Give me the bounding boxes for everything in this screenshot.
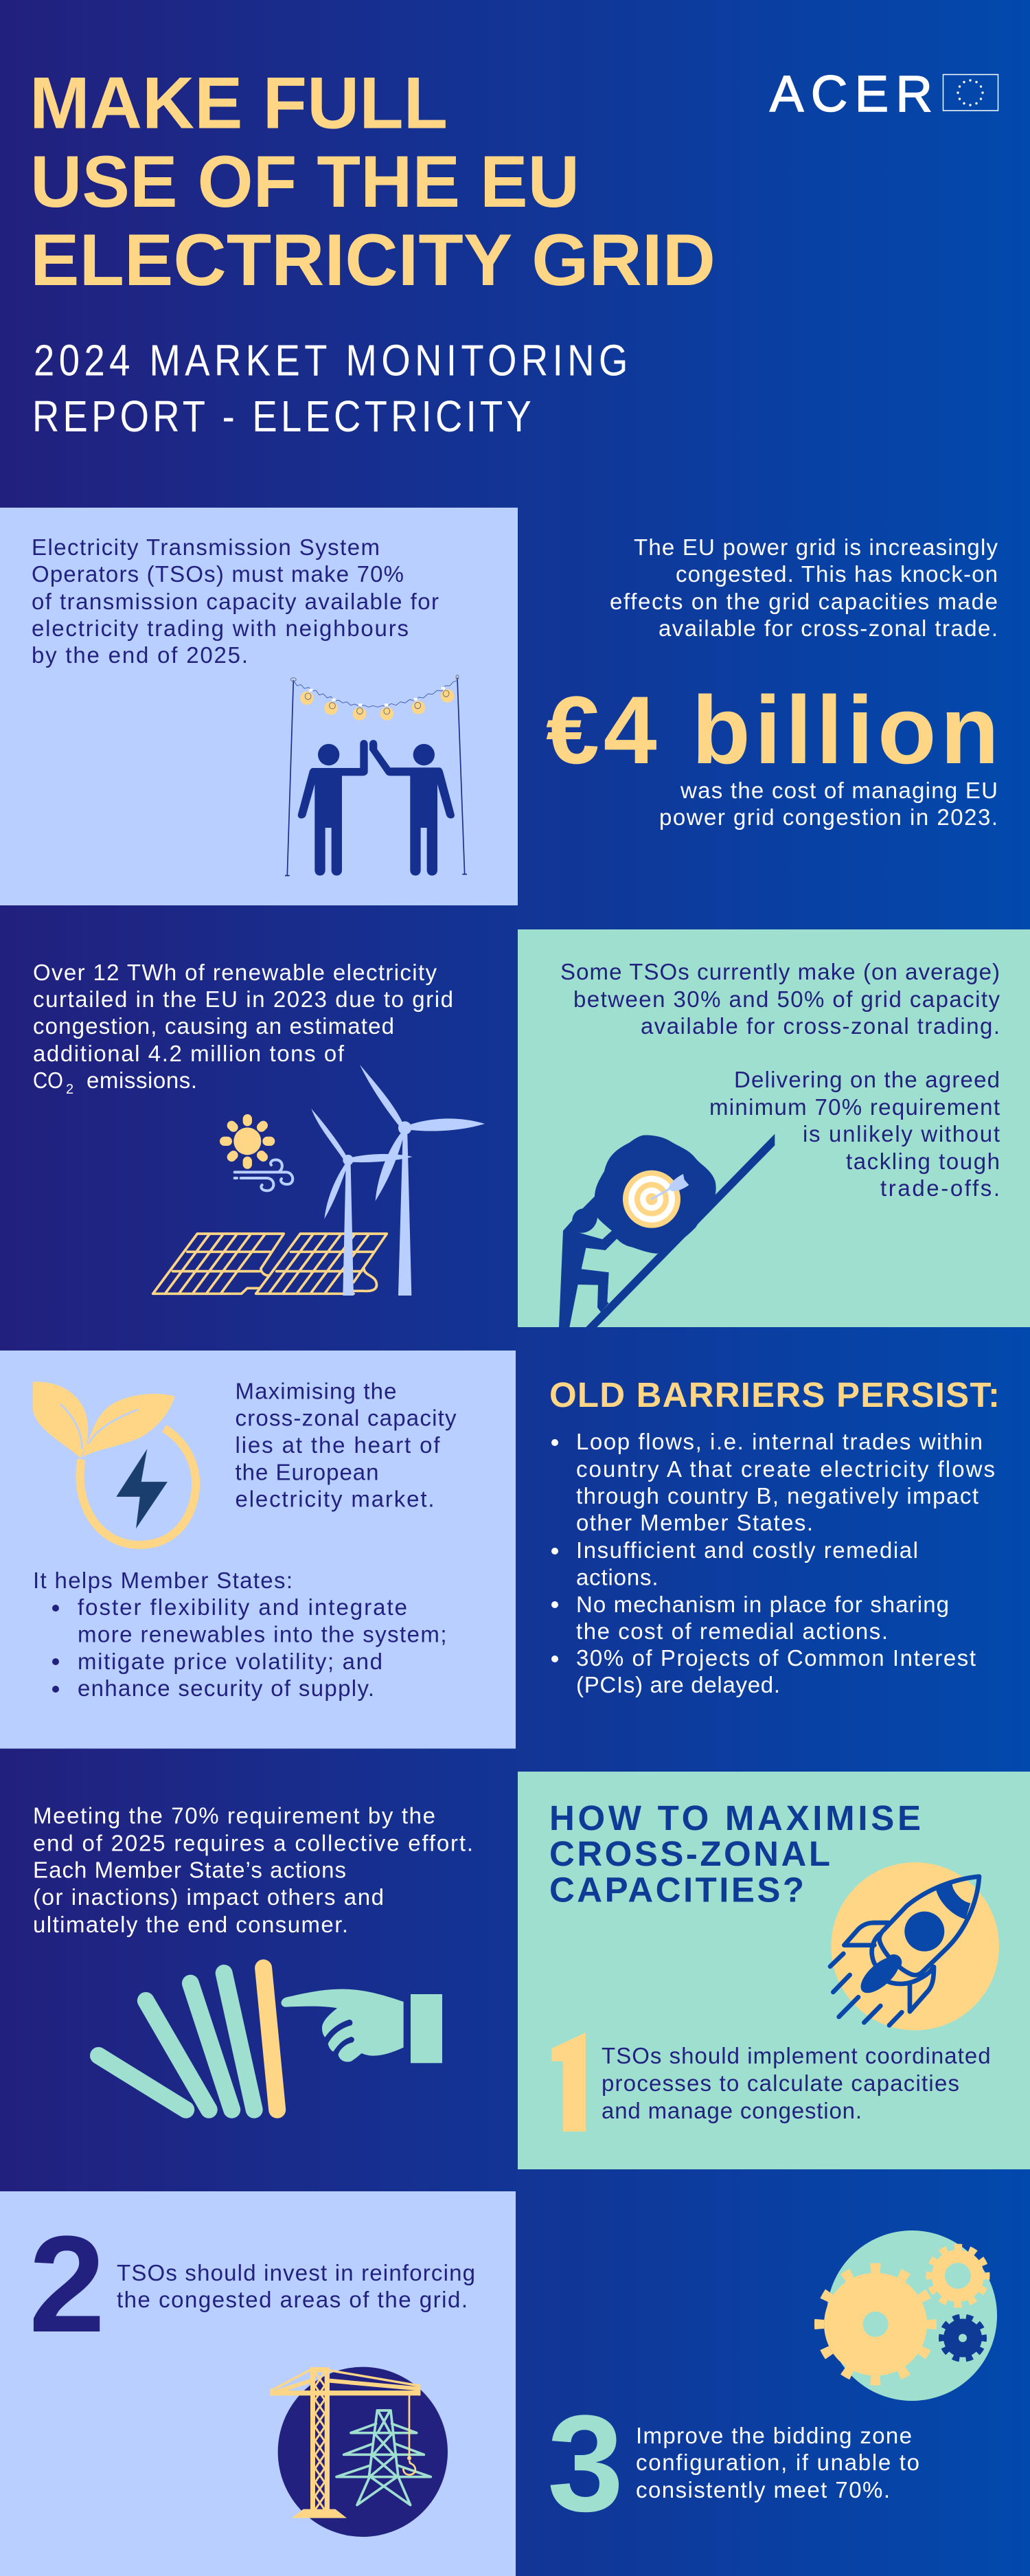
panel: congestion cost bbox=[546, 534, 999, 830]
list: barriers: Loop flows, i.e. internal trades within bbox=[576, 1429, 983, 1454]
text: meeting the requirement bbox=[33, 1803, 473, 1937]
panel: step 2 bbox=[0, 2191, 516, 2576]
subtitle bbox=[32, 335, 628, 441]
icon: crane and pylon bbox=[270, 2367, 448, 2537]
text: 30 to 50 percent: between 30% and 50% of grid capacity bbox=[573, 986, 1000, 1012]
subtitle: REPORT - ELECTRICITY bbox=[32, 392, 531, 441]
panel: old barriers bbox=[549, 1375, 1000, 1697]
text: meeting the requirement: end of 2025 requires a collective effort. bbox=[33, 1830, 473, 1856]
text: 12 TWh curtailed: CO bbox=[33, 1067, 63, 1093]
icon: high five under string lights bbox=[285, 675, 467, 876]
icon: pushing hand bbox=[282, 1989, 442, 2063]
text: meeting the requirement: ultimately the end consumer. bbox=[33, 1912, 348, 1937]
text: TSOs must make 70% bbox=[32, 534, 439, 668]
text: step 2: TSOs should invest in reinforcing bbox=[117, 2260, 475, 2285]
text: delivering on requirement: tackling tough bbox=[846, 1149, 1000, 1174]
text: 12 TWh curtailed: congestion, causing an estimated bbox=[33, 1013, 394, 1039]
panel: curtailed renewables bbox=[33, 960, 485, 1296]
list: barriers: actions. bbox=[576, 1565, 658, 1590]
text: step 1: and manage congestion. bbox=[602, 2098, 862, 2123]
icon: solar panels, sun, wind and turbines bbox=[153, 1065, 485, 1296]
list: barriers: Insufficient and costly remedial bbox=[576, 1537, 918, 1563]
text: 30 to 50 percent: available for cross-zonal trading. bbox=[641, 1013, 1000, 1039]
text: step 3: Improve the bidding zone bbox=[636, 2423, 912, 2448]
text: delivering on requirement: trade-offs. bbox=[880, 1175, 1000, 1201]
text: maximising the capacity: lies at the heart of bbox=[235, 1432, 440, 1458]
text: 12 TWh curtailed: 2 bbox=[66, 1082, 73, 1097]
icon: target with dart bbox=[623, 1171, 689, 1228]
text: maximising the capacity: cross-zonal capacity bbox=[235, 1405, 457, 1431]
icon: pylon bbox=[336, 2410, 431, 2505]
text: step 1: processes to calculate capacities bbox=[602, 2070, 959, 2096]
header bbox=[30, 62, 998, 441]
icon: falling dominoes bbox=[98, 1968, 277, 2110]
text: delivering on requirement: minimum 70% requirement bbox=[709, 1094, 1000, 1120]
text: TSOs must make 70%: Operators (TSOs) must make 70% bbox=[32, 561, 404, 587]
text: 12 TWh curtailed: emissions. bbox=[87, 1067, 197, 1093]
text: meeting the requirement: (or inactions) impact others and bbox=[33, 1884, 384, 1910]
panel: step 3 bbox=[547, 2230, 997, 2540]
list: barriers bbox=[551, 1429, 995, 1697]
text: maximising the capacity: the European bbox=[235, 1459, 379, 1484]
text: step 3 bbox=[636, 2423, 919, 2502]
icon: gears bbox=[819, 2230, 997, 2401]
text: meeting the requirement: Meeting the 70% requirement by the bbox=[33, 1803, 435, 1829]
text: meeting the requirement: Each Member State’s actions bbox=[33, 1857, 346, 1883]
text: TSOs must make 70%: of transmission capacity available for bbox=[32, 589, 439, 614]
icon: wind turbines bbox=[311, 1065, 485, 1296]
text: grid congestion: available for cross-zonal trade. bbox=[659, 615, 998, 641]
heading: old barriers persist: OLD BARRIERS PERSIST: bbox=[549, 1375, 1000, 1414]
icon: figure pushing boulder uphill bbox=[559, 1134, 775, 1327]
text: cost caption bbox=[659, 778, 998, 830]
list: barriers: 30% of Projects of Common Interest bbox=[576, 1645, 976, 1671]
icon: wind bbox=[235, 1160, 293, 1190]
text: grid congestion: congested. This has knock-on bbox=[676, 561, 998, 587]
title: MAKE FULL bbox=[30, 62, 448, 144]
text: TSOs must make 70%: by the end of 2025. bbox=[32, 642, 248, 668]
text: 12 TWh curtailed: additional 4.2 million tons of bbox=[33, 1041, 345, 1066]
text: delivering on requirement: is unlikely without bbox=[803, 1121, 1000, 1146]
text: benefits for Member States: It helps Member States: bbox=[33, 1568, 293, 1593]
heading: how to maximise cross-zonal capacities: CAPACITIES? bbox=[549, 1870, 804, 1910]
icon: sun bbox=[225, 1119, 271, 1164]
text: cost caption: was the cost of managing EU bbox=[680, 778, 998, 803]
list: barriers: the cost of remedial actions. bbox=[576, 1618, 888, 1644]
heading: how to maximise cross-zonal capacities: HOW TO MAXIMISE bbox=[549, 1798, 921, 1838]
big number: 4 billion euro: €4 billion bbox=[546, 676, 999, 784]
step number 2: 2 bbox=[29, 2208, 105, 2361]
text: step 2: the congested areas of the grid. bbox=[117, 2287, 468, 2312]
list: barriers: through country B, negatively impact bbox=[576, 1483, 978, 1509]
text: 12 TWh curtailed: Over 12 TWh of renewable electricity bbox=[33, 960, 437, 985]
text: step 3: configuration, if unable to bbox=[636, 2450, 919, 2475]
text: benefits for Member States: mitigate price volatility; and bbox=[78, 1649, 382, 1674]
text: delivering on requirement: Delivering on the agreed bbox=[734, 1067, 1000, 1092]
text: delivering on requirement bbox=[709, 1067, 1000, 1201]
title: ELECTRICITY GRID bbox=[30, 218, 716, 301]
title bbox=[30, 62, 716, 301]
icon: leaves with lightning bolt bbox=[33, 1382, 196, 1545]
text: maximising the capacity bbox=[235, 1378, 457, 1511]
text: grid congestion: The EU power grid is increasingly bbox=[634, 534, 998, 560]
subtitle: 2024 MARKET MONITORING bbox=[34, 335, 628, 385]
title: USE OF THE EU bbox=[30, 140, 580, 223]
text: TSOs must make 70%: Electricity Transmission System bbox=[32, 534, 380, 560]
icon: crane bbox=[270, 2367, 420, 2518]
text: TSOs must make 70%: electricity trading with neighbours bbox=[32, 615, 409, 641]
text: step 1 bbox=[602, 2043, 991, 2123]
logo: ACER with EU flag: ACER bbox=[770, 65, 932, 122]
text: step 1: TSOs should implement coordinated bbox=[602, 2043, 991, 2068]
panel: current availability bbox=[518, 929, 1030, 1327]
step number 3: 3 bbox=[547, 2387, 623, 2540]
list: barriers: No mechanism in place for sharing bbox=[576, 1592, 949, 1617]
panel: collective effort bbox=[33, 1803, 473, 2110]
heading: how to maximise cross-zonal capacities bbox=[549, 1798, 921, 1910]
step number 1: 1 bbox=[529, 2008, 605, 2161]
text: 30 to 50 percent bbox=[560, 959, 1000, 1039]
text: maximising the capacity: Maximising the bbox=[235, 1378, 397, 1404]
list: barriers: other Member States. bbox=[576, 1510, 813, 1535]
text: 12 TWh curtailed bbox=[33, 960, 453, 1097]
text: grid congestion bbox=[610, 534, 998, 641]
panel: 70% requirement bbox=[0, 508, 518, 905]
list: barriers: country A that create electricity flows bbox=[576, 1456, 995, 1482]
list: barriers: (PCIs) are delayed. bbox=[576, 1672, 780, 1697]
text: benefits for Member States: enhance security of supply. bbox=[78, 1675, 374, 1701]
text: maximising the capacity: electricity market. bbox=[235, 1486, 434, 1511]
icon: solar panels bbox=[153, 1234, 387, 1293]
text: cost caption: power grid congestion in 2023. bbox=[659, 804, 998, 830]
text: grid congestion: effects on the grid capacities made bbox=[610, 589, 998, 614]
text: 30 to 50 percent: Some TSOs currently make (on average) bbox=[560, 959, 1000, 984]
icon: rocket bbox=[830, 1862, 999, 2031]
heading: how to maximise cross-zonal capacities: CROSS-ZONAL bbox=[549, 1834, 830, 1873]
text: benefits for Member States bbox=[33, 1568, 446, 1701]
text: step 2 bbox=[117, 2260, 475, 2312]
text: benefits for Member States: more renewables into the system; bbox=[78, 1621, 446, 1647]
panel: heart of the market bbox=[0, 1351, 516, 1749]
text: step 3: consistently meet 70%. bbox=[636, 2477, 890, 2502]
text: 12 TWh curtailed: curtailed in the EU in 2023 due to grid bbox=[33, 986, 453, 1012]
text: benefits for Member States: foster flexibility and integrate bbox=[78, 1594, 407, 1620]
panel: how to maximise bbox=[518, 1772, 1030, 2169]
